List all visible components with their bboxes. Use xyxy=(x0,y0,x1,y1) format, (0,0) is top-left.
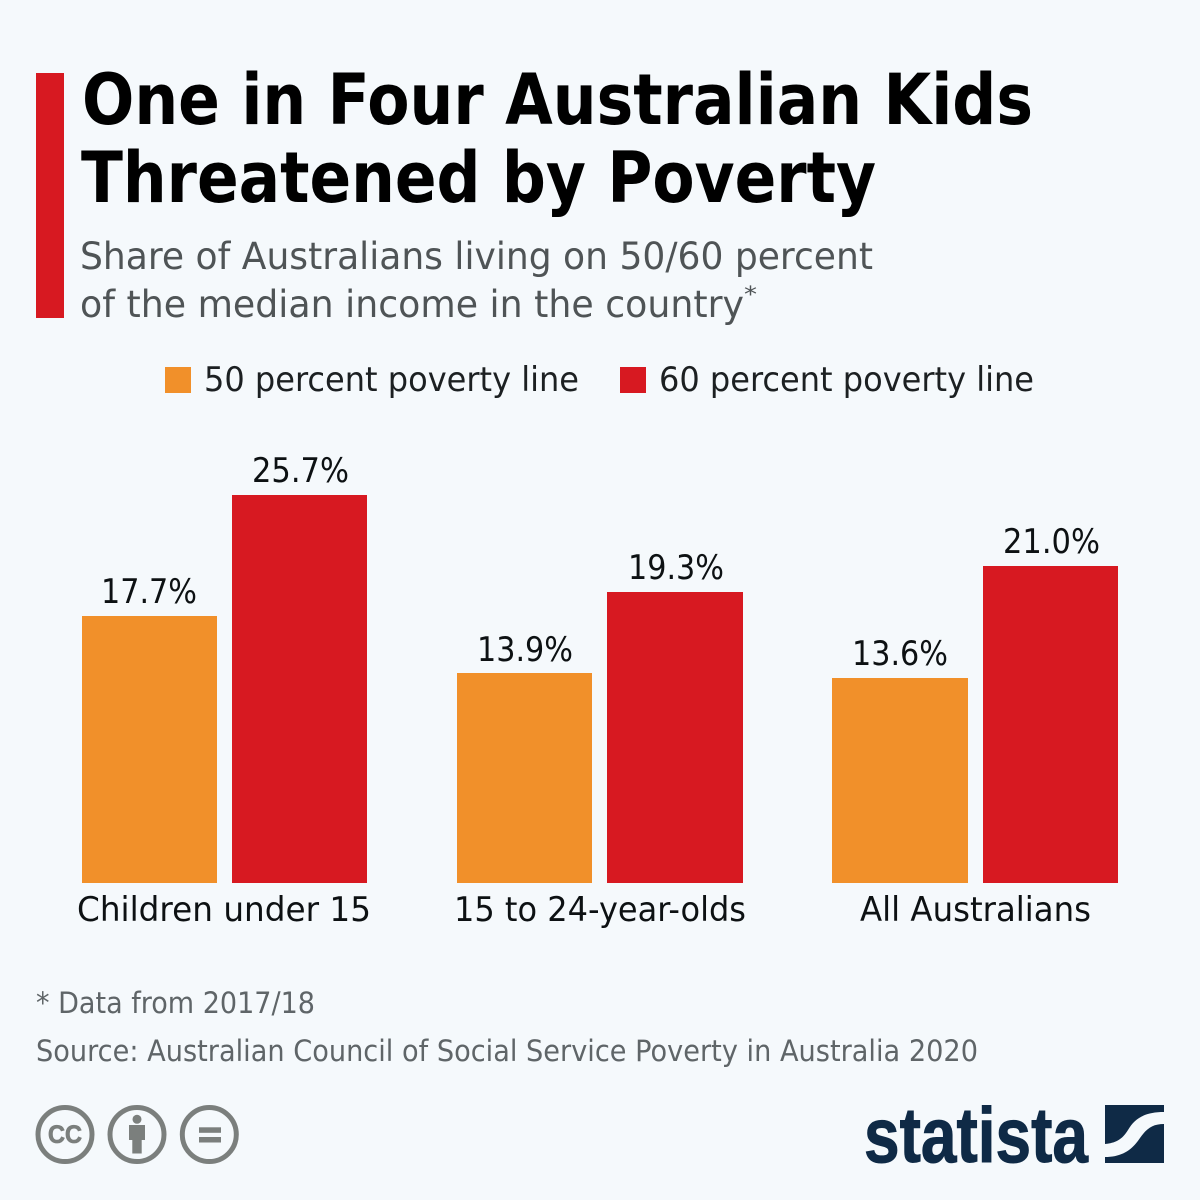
subtitle xyxy=(80,235,873,326)
subtitle: of the median income in the country xyxy=(80,283,744,326)
icon: creative commons: CC xyxy=(48,1121,82,1149)
group: all Australians xyxy=(832,522,1118,930)
subtitle: * xyxy=(744,283,757,308)
group: all Australians: All Australians xyxy=(860,890,1091,930)
group: children under 15: 25.7% xyxy=(252,451,349,491)
group: children under 15: 17.7% xyxy=(101,572,197,612)
group: 15 to 24-year-olds: 15 to 24-year-olds xyxy=(454,890,746,930)
group: 15 to 24-year-olds xyxy=(454,548,746,930)
legend item: 50 percent poverty line: 50 percent poverty line xyxy=(204,360,579,400)
footnote: * Data from 2017/18 xyxy=(36,986,315,1020)
legend item: 60 percent poverty line: 60 percent poverty line xyxy=(659,360,1034,400)
icon: creative commons xyxy=(38,1108,92,1162)
group: children under 15: Children under 15 xyxy=(77,890,371,930)
group: all Australians: 21.0% xyxy=(1003,522,1100,562)
group: 15 to 24-year-olds: 13.9% xyxy=(477,630,573,670)
icon: statista mark xyxy=(1105,1105,1164,1163)
title: Threatened by Poverty xyxy=(81,137,876,219)
source: Source: Australian Council of Social Service Poverty in Australia 2020 xyxy=(36,1034,978,1068)
title: One in Four Australian Kids xyxy=(82,59,1033,141)
group: all Australians: 13.6% xyxy=(852,634,948,674)
title xyxy=(81,59,1033,219)
icon: attribution xyxy=(110,1108,164,1162)
bar chart xyxy=(77,451,1118,930)
subtitle: Share of Australians living on 50/60 percent xyxy=(80,235,873,278)
group: 15 to 24-year-olds: 19.3% xyxy=(628,548,724,588)
accent bar xyxy=(36,73,64,318)
group: children under 15 xyxy=(77,451,371,930)
legend xyxy=(165,360,1034,400)
icon: no derivatives xyxy=(182,1108,236,1162)
statista logo: statista xyxy=(864,1091,1088,1179)
